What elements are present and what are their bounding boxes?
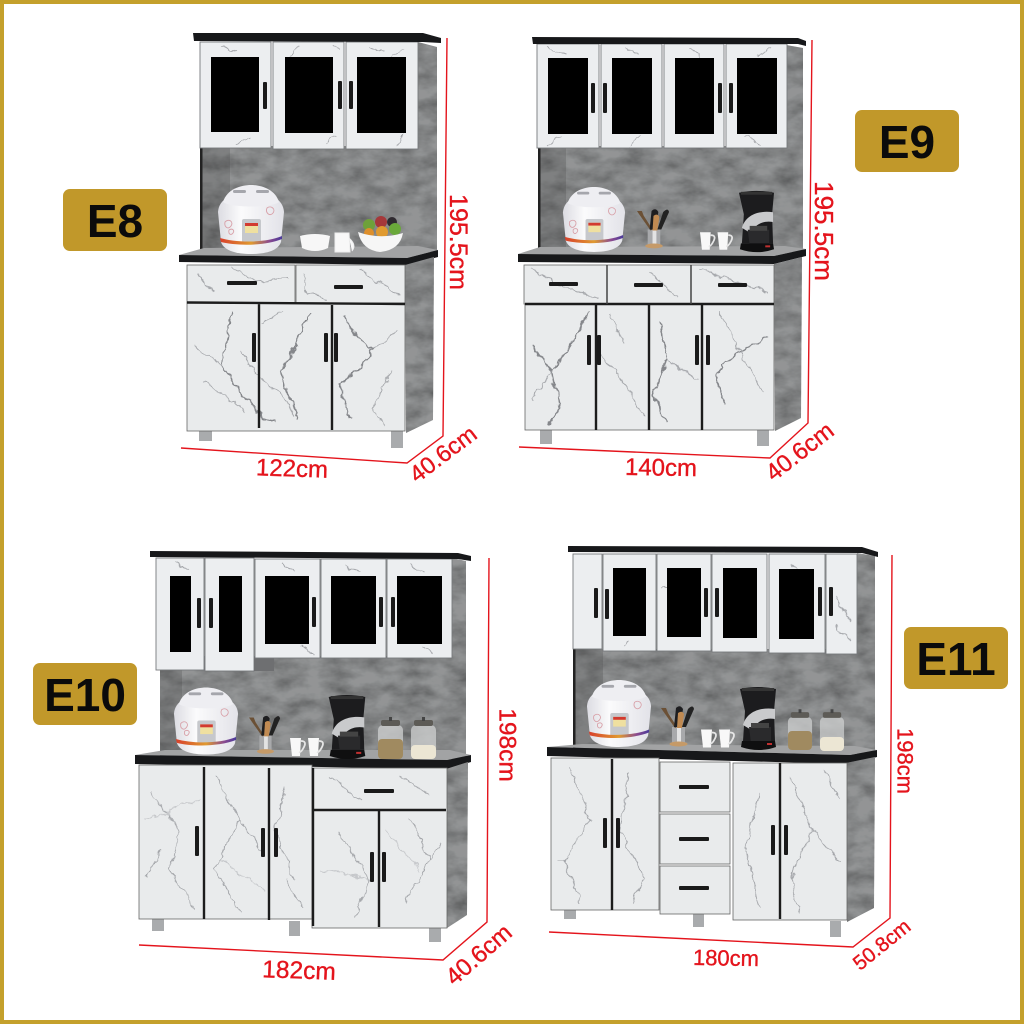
cups (701, 730, 734, 748)
label: E9: E9 (879, 116, 935, 168)
jar with flour (820, 709, 844, 751)
label: E11 (904, 627, 1008, 689)
label: E10: E10 (44, 669, 126, 721)
counter (518, 246, 806, 264)
top slab (150, 551, 471, 561)
rice cooker (218, 185, 284, 254)
bowl (300, 234, 330, 251)
upper doors with glass (537, 44, 787, 148)
counter (179, 246, 438, 265)
height: 195.5cm: 195.5cm (809, 181, 839, 281)
top slab (532, 37, 806, 46)
lower side (446, 762, 468, 928)
middle drawers (660, 762, 730, 914)
top slab (193, 33, 441, 43)
panel: cabinet E8 (179, 33, 482, 488)
lower side (405, 257, 434, 433)
label: E11: E11 (916, 633, 996, 685)
cups (700, 232, 732, 250)
width: 122cm: 122cm (256, 454, 328, 484)
coffee maker (739, 191, 774, 252)
upper doors with glass (156, 558, 452, 671)
cups (290, 738, 323, 756)
cup (335, 233, 354, 252)
hutch side and back (538, 45, 803, 252)
lower doors and drawers (551, 758, 847, 920)
coffee maker (329, 695, 365, 759)
counter (135, 750, 471, 769)
lower doors and drawers (524, 265, 774, 430)
width: 140cm: 140cm (625, 454, 697, 482)
lower side (774, 257, 802, 431)
utensils (637, 209, 669, 248)
height: 198cm: 198cm (892, 728, 918, 794)
lower doors and drawers (139, 765, 447, 928)
depth: 40.6cm: 40.6cm (404, 420, 482, 488)
panel: cabinet E9 (518, 37, 839, 487)
upper doors with glass (200, 42, 418, 149)
rice cooker (563, 187, 625, 252)
jar with grain (378, 717, 403, 759)
coffee maker (740, 687, 776, 750)
lower doors and drawers (187, 265, 405, 431)
dimension lines (139, 558, 489, 960)
jar with grain (788, 709, 812, 750)
utensils (661, 706, 694, 746)
hutch side and back (200, 42, 437, 252)
counter (547, 744, 877, 764)
label: E8 (63, 189, 167, 251)
depth: 50.8cm: 50.8cm (849, 915, 915, 975)
dimension lines (181, 38, 447, 463)
hutch side and back (573, 553, 875, 755)
depth: 40.6cm: 40.6cm (761, 417, 839, 487)
width: 180cm: 180cm (693, 945, 759, 971)
utensils (249, 716, 280, 754)
fruit bowl (358, 216, 403, 252)
upper doors with glass (573, 554, 857, 654)
jar with flour (411, 717, 436, 759)
dimension lines (549, 555, 892, 947)
label: E10 (33, 663, 137, 725)
label: E8: E8 (87, 195, 143, 247)
panel: cabinet E10 (135, 551, 520, 991)
top slab (568, 546, 878, 557)
height: 195.5cm: 195.5cm (444, 194, 472, 290)
depth: 40.6cm: 40.6cm (440, 919, 518, 991)
width: 182cm: 182cm (262, 956, 336, 986)
label: E9 (855, 110, 959, 172)
dimension lines (519, 40, 812, 458)
height: 198cm: 198cm (494, 708, 520, 782)
lower side (846, 757, 875, 922)
rice cooker (587, 680, 651, 747)
rice cooker (174, 688, 238, 754)
panel: cabinet E11 (547, 546, 918, 975)
hutch side and back (160, 558, 466, 760)
